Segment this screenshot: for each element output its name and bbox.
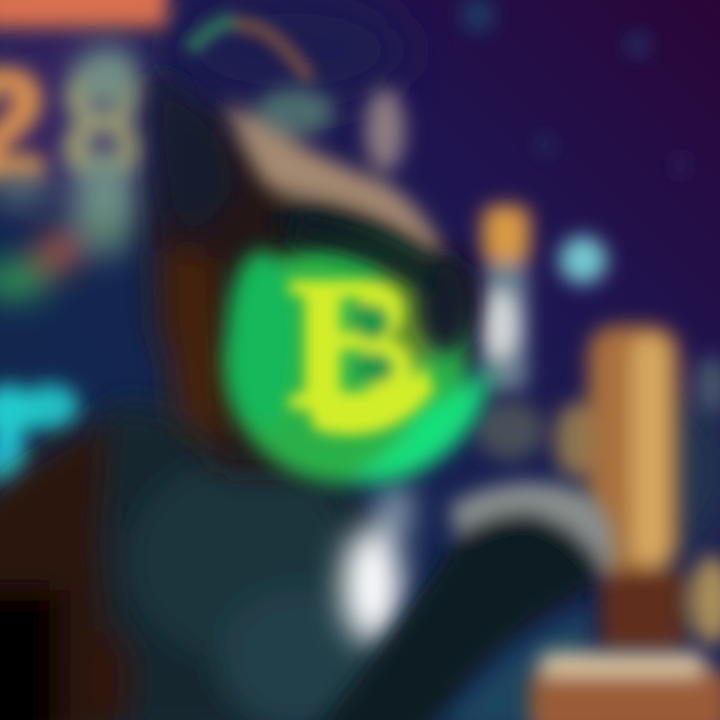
cat head dark [148,70,470,470]
wooden post [476,325,720,650]
cat body [0,400,389,720]
white chest [342,482,409,643]
raised paw [310,482,614,720]
blurred numerals: 8 [62,40,145,208]
stars [462,0,687,284]
wooden base slab [530,652,720,720]
hat and fur highlight [225,88,450,295]
bottle and tower right [478,205,530,392]
cyan glow left [0,384,80,490]
green coin [223,240,490,484]
decorative coloured streak left [0,45,140,300]
coin letter: B [290,241,413,446]
top left orange banner [0,0,168,28]
blurred numerals [0,40,145,208]
antenna arc [190,20,310,80]
cat [0,70,470,720]
muzzle dark [290,215,473,353]
